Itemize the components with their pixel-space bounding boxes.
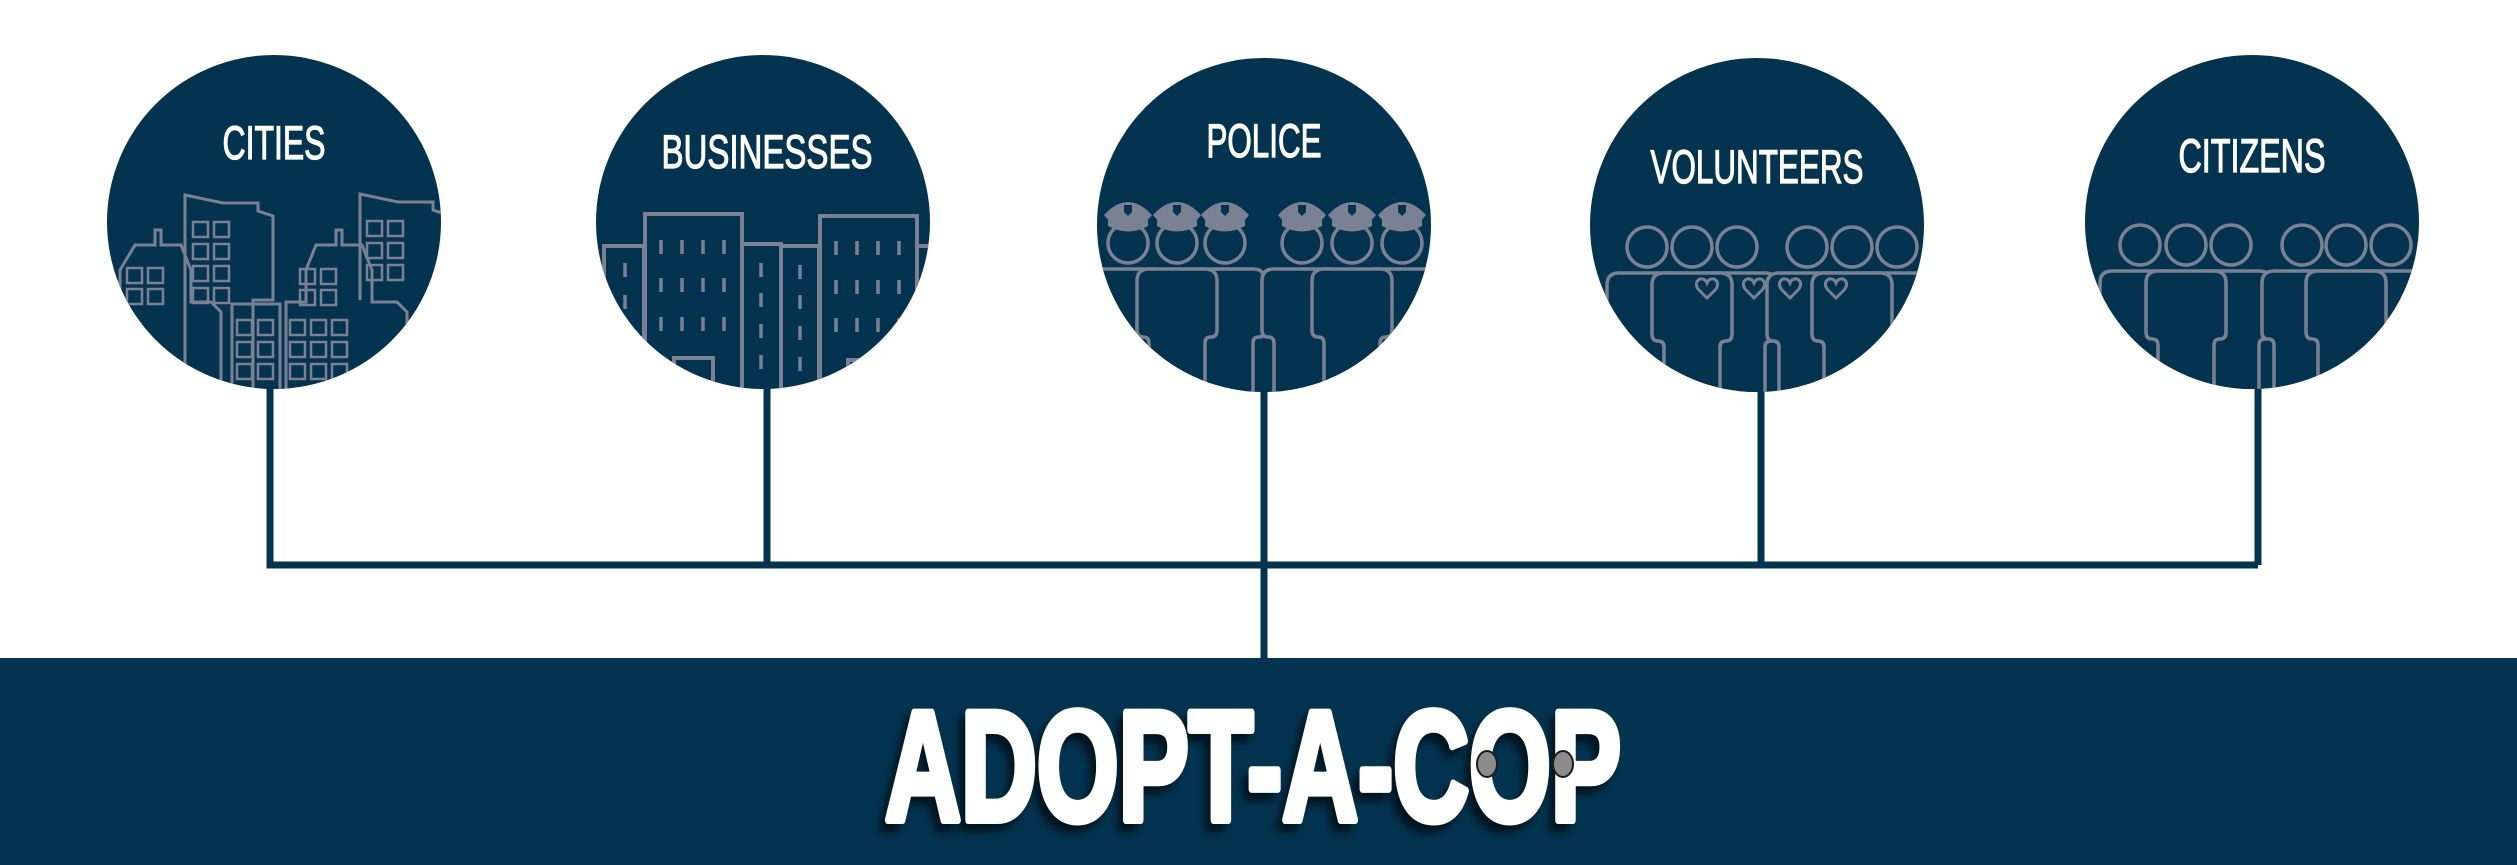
icon: office buildings [602,212,928,388]
title: ADOPT-A-COP: ADOPT-A-COP [879,688,1615,862]
circle: volunteers [1590,58,1924,392]
circle: police [1097,58,1431,392]
connector lines [270,385,2258,658]
label: BUSINESSES: BUSINESSES [662,125,872,178]
circle: citizens [2085,55,2419,389]
label: VOLUNTEERS: VOLUNTEERS [1650,140,1864,193]
banner [0,658,2517,865]
icon: volunteers with hearts [1605,225,1919,392]
title: ADOPT-A-COP: ADOPT-A-COP [885,680,1621,854]
icon: citizens group [2098,223,2413,389]
circle: cities [107,55,448,400]
icon: city skyline [120,194,448,400]
title: ADOPT-A-COP [879,680,1621,862]
circle: businesses [596,55,930,389]
label: CITIES: CITIES [222,116,326,169]
label: POLICE: POLICE [1206,114,1322,167]
label: CITIZENS: CITIZENS [2178,129,2326,182]
icon: police officers [1102,202,1426,392]
icon: handcuff dots [1477,751,1573,777]
